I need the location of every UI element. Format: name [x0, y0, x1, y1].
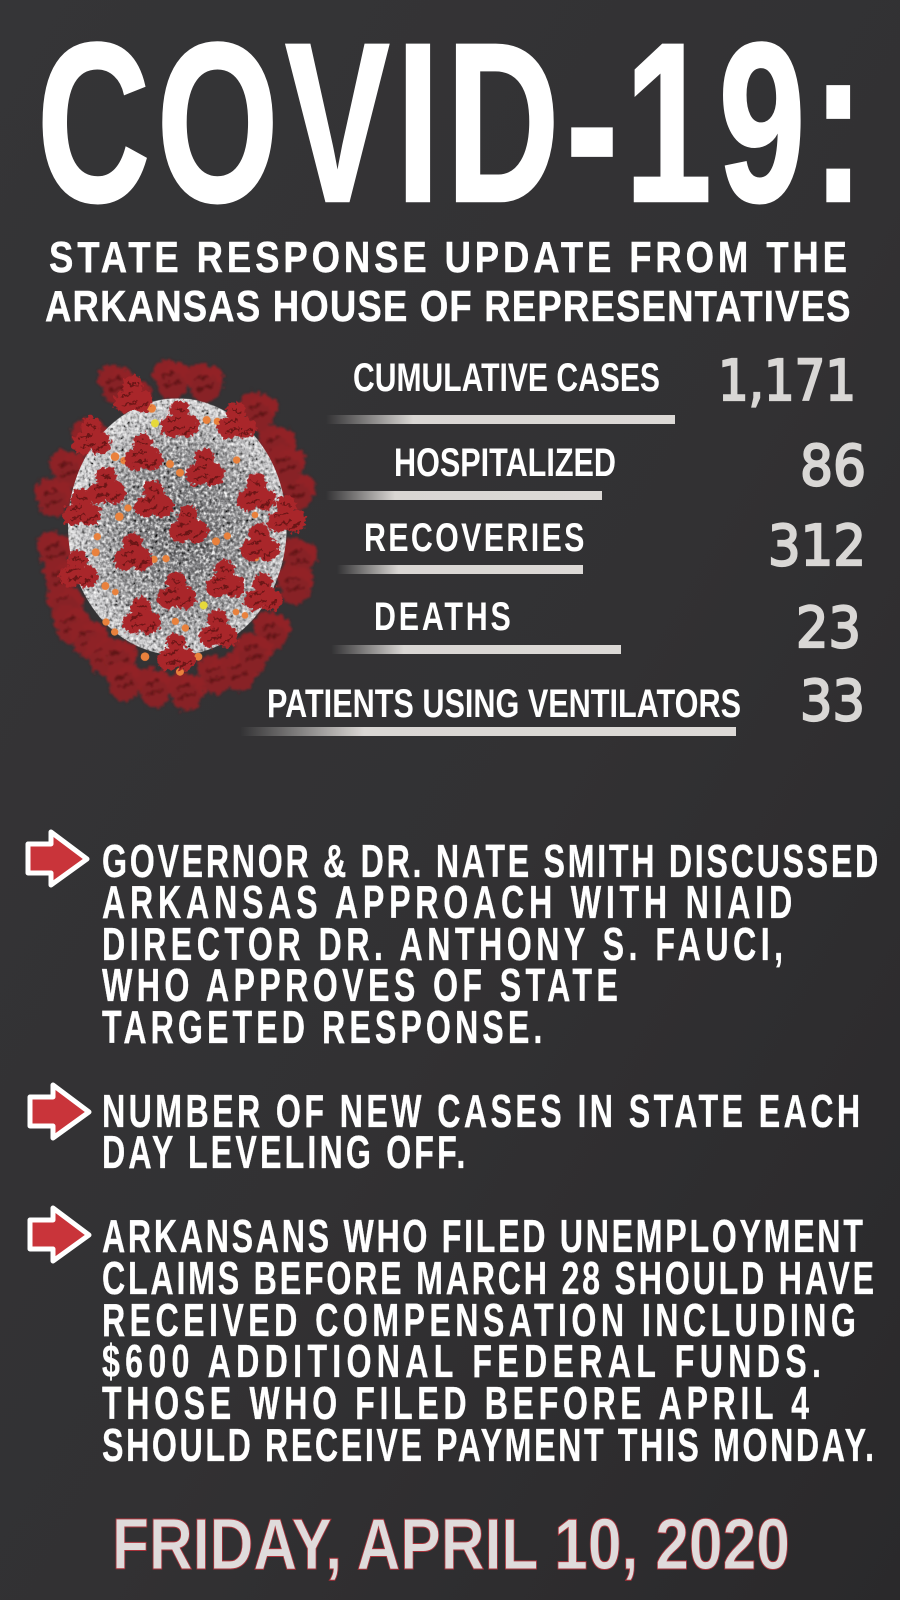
text block: unemployment [102, 1211, 874, 1471]
arrow: bullet 1 [28, 832, 87, 885]
icon: coronavirus [35, 360, 318, 711]
arrow: bullet 2 [30, 1085, 89, 1138]
text block: unemployment: $600 ADDITIONAL FEDERAL FUNDS. [102, 1336, 821, 1387]
stat: cumulative cases: 1,171 [718, 349, 856, 414]
stat: patients using ventilators: 33 [800, 669, 865, 734]
stat: hospitalized: HOSPITALIZED [394, 441, 616, 485]
stat: recoveries: RECOVERIES [364, 515, 584, 560]
stat: hospitalized: 86 [800, 434, 866, 499]
text block: governor and Dr. Smith: GOVERNOR & DR. NATE SMITH DISCUSSED [102, 836, 878, 887]
text block: new cases [102, 1086, 860, 1178]
stat: hospitalized [326, 434, 866, 500]
text block: governor and Dr. Smith: DIRECTOR DR. ANTHONY S. FAUCI, [102, 919, 783, 970]
stat: deaths: 23 [796, 596, 861, 661]
text block: new cases: NUMBER OF NEW CASES IN STATE EACH [102, 1086, 860, 1137]
text block: unemployment: ARKANSANS WHO FILED UNEMPLOYMENT [102, 1211, 863, 1262]
stat: deaths: DEATHS [374, 594, 511, 639]
arrow: bullet 3 [30, 1208, 89, 1261]
stat: recoveries: 312 [768, 514, 866, 579]
text block: unemployment: RECEIVED COMPENSATION INCLUDING [102, 1295, 856, 1346]
text block: unemployment: SHOULD RECEIVE PAYMENT THIS MONDAY. [102, 1420, 874, 1471]
text block: governor and Dr. Smith: TARGETED RESPONSE. [102, 1002, 542, 1053]
subtitle [45, 233, 851, 331]
stat: patients using ventilators: PATIENTS USING VENTILATORS [267, 682, 741, 726]
date footer: FRIDAY, APRIL 10, 2020 [112, 1505, 790, 1585]
subtitle: ARKANSAS HOUSE OF REPRESENTATIVES [45, 282, 851, 331]
stat: cumulative cases [326, 349, 856, 424]
text block: governor and Dr. Smith: ARKANSAS APPROACH WITH NIAID [102, 877, 792, 928]
text block: unemployment: THOSE WHO FILED BEFORE APRIL 4 [102, 1378, 809, 1429]
stat: patients using ventilators [240, 669, 865, 736]
stat: deaths [331, 594, 861, 661]
text block: new cases: DAY LEVELING OFF. [102, 1127, 465, 1178]
text block: unemployment: CLAIMS BEFORE MARCH 28 SHOULD HAVE [102, 1253, 874, 1304]
stat: recoveries [337, 514, 866, 579]
text block: governor and Dr. Smith [102, 836, 878, 1053]
title: COVID-19: [37, 0, 864, 250]
text block: governor and Dr. Smith: WHO APPROVES OF STATE [102, 960, 618, 1011]
stat: cumulative cases: CUMULATIVE CASES [353, 356, 660, 400]
subtitle: STATE RESPONSE UPDATE FROM THE [49, 233, 847, 282]
